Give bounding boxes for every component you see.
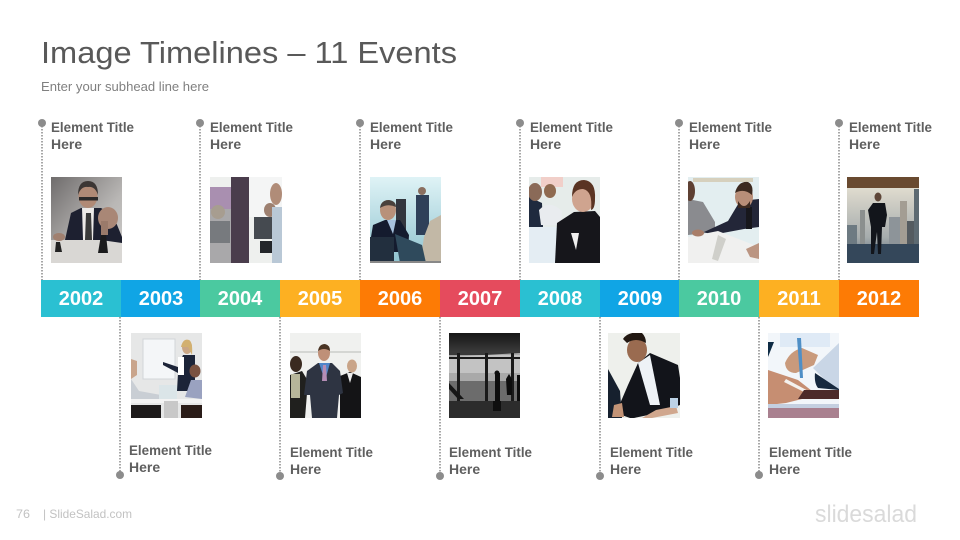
event 2006: Element Title bbox=[370, 119, 453, 135]
timeline bar: 2005 bbox=[298, 288, 342, 310]
logo: slidesalad bbox=[815, 501, 917, 528]
event 2008 bbox=[516, 119, 613, 280]
event 2003: Element Title bbox=[129, 442, 212, 458]
event 2005: Here bbox=[290, 461, 321, 477]
event 2006 bbox=[356, 119, 453, 280]
timeline bar: 2012 bbox=[857, 288, 901, 310]
event 2003: Here bbox=[129, 459, 160, 475]
photo: man playing chess bbox=[51, 177, 122, 263]
photo: blurred office meeting bbox=[210, 177, 282, 263]
photo: colleagues reviewing documents bbox=[688, 177, 759, 263]
event 2002 bbox=[38, 119, 134, 280]
timeline bar: 2010 bbox=[697, 288, 741, 310]
event 2007: Element Title bbox=[449, 444, 532, 460]
event 2008: Here bbox=[530, 136, 561, 152]
event 2008: Element Title bbox=[530, 119, 613, 135]
subhead: Enter your subhead line here bbox=[41, 80, 209, 94]
event 2012: Element Title bbox=[849, 119, 932, 135]
footer source: | SlideSalad.com bbox=[43, 507, 132, 521]
timeline bar bbox=[41, 280, 919, 317]
event 2010: Element Title bbox=[689, 119, 772, 135]
photo: hands signing a document bbox=[768, 333, 839, 418]
event 2004 bbox=[196, 119, 293, 280]
event 2011 bbox=[755, 317, 852, 479]
event 2011: Element Title bbox=[769, 444, 852, 460]
photo: silhouettes at office window bbox=[449, 333, 520, 418]
photo: presentation at whiteboard bbox=[131, 333, 202, 418]
event 2012: Here bbox=[849, 136, 880, 152]
event 2004: Here bbox=[210, 136, 241, 152]
timeline bar: 2006 bbox=[378, 288, 422, 310]
photo: smiling businesswoman bbox=[529, 177, 600, 263]
timeline bar: 2009 bbox=[618, 288, 662, 310]
timeline bar: 2003 bbox=[139, 288, 183, 310]
timeline bar: 2008 bbox=[538, 288, 582, 310]
event 2012 bbox=[835, 119, 932, 280]
title: Image Timelines – 11 Events bbox=[41, 35, 457, 70]
event 2007: Here bbox=[449, 461, 480, 477]
photo: man facing city skyline bbox=[847, 177, 919, 263]
event 2009: Here bbox=[610, 461, 641, 477]
timeline bar: 2002 bbox=[59, 288, 103, 310]
timeline bar: 2011 bbox=[777, 288, 821, 310]
event 2005 bbox=[276, 317, 373, 480]
page number: 76 bbox=[16, 507, 30, 521]
event 2011: Here bbox=[769, 461, 800, 477]
event 2007 bbox=[436, 317, 532, 480]
event 2005: Element Title bbox=[290, 444, 373, 460]
event 2004: Element Title bbox=[210, 119, 293, 135]
event 2009 bbox=[596, 317, 693, 480]
event 2010: Here bbox=[689, 136, 720, 152]
event 2010 bbox=[675, 119, 772, 280]
event 2002: Element Title bbox=[51, 119, 134, 135]
photo: business team with laptop bbox=[370, 177, 441, 263]
photo: three business people walking bbox=[290, 333, 361, 418]
event 2003 bbox=[116, 317, 212, 479]
timeline bar: 2004 bbox=[218, 288, 263, 310]
photo: businesswoman shaking hands bbox=[608, 333, 680, 418]
event 2009: Element Title bbox=[610, 444, 693, 460]
event 2006: Here bbox=[370, 136, 401, 152]
timeline bar: 2007 bbox=[458, 288, 502, 310]
event 2002: Here bbox=[51, 136, 82, 152]
